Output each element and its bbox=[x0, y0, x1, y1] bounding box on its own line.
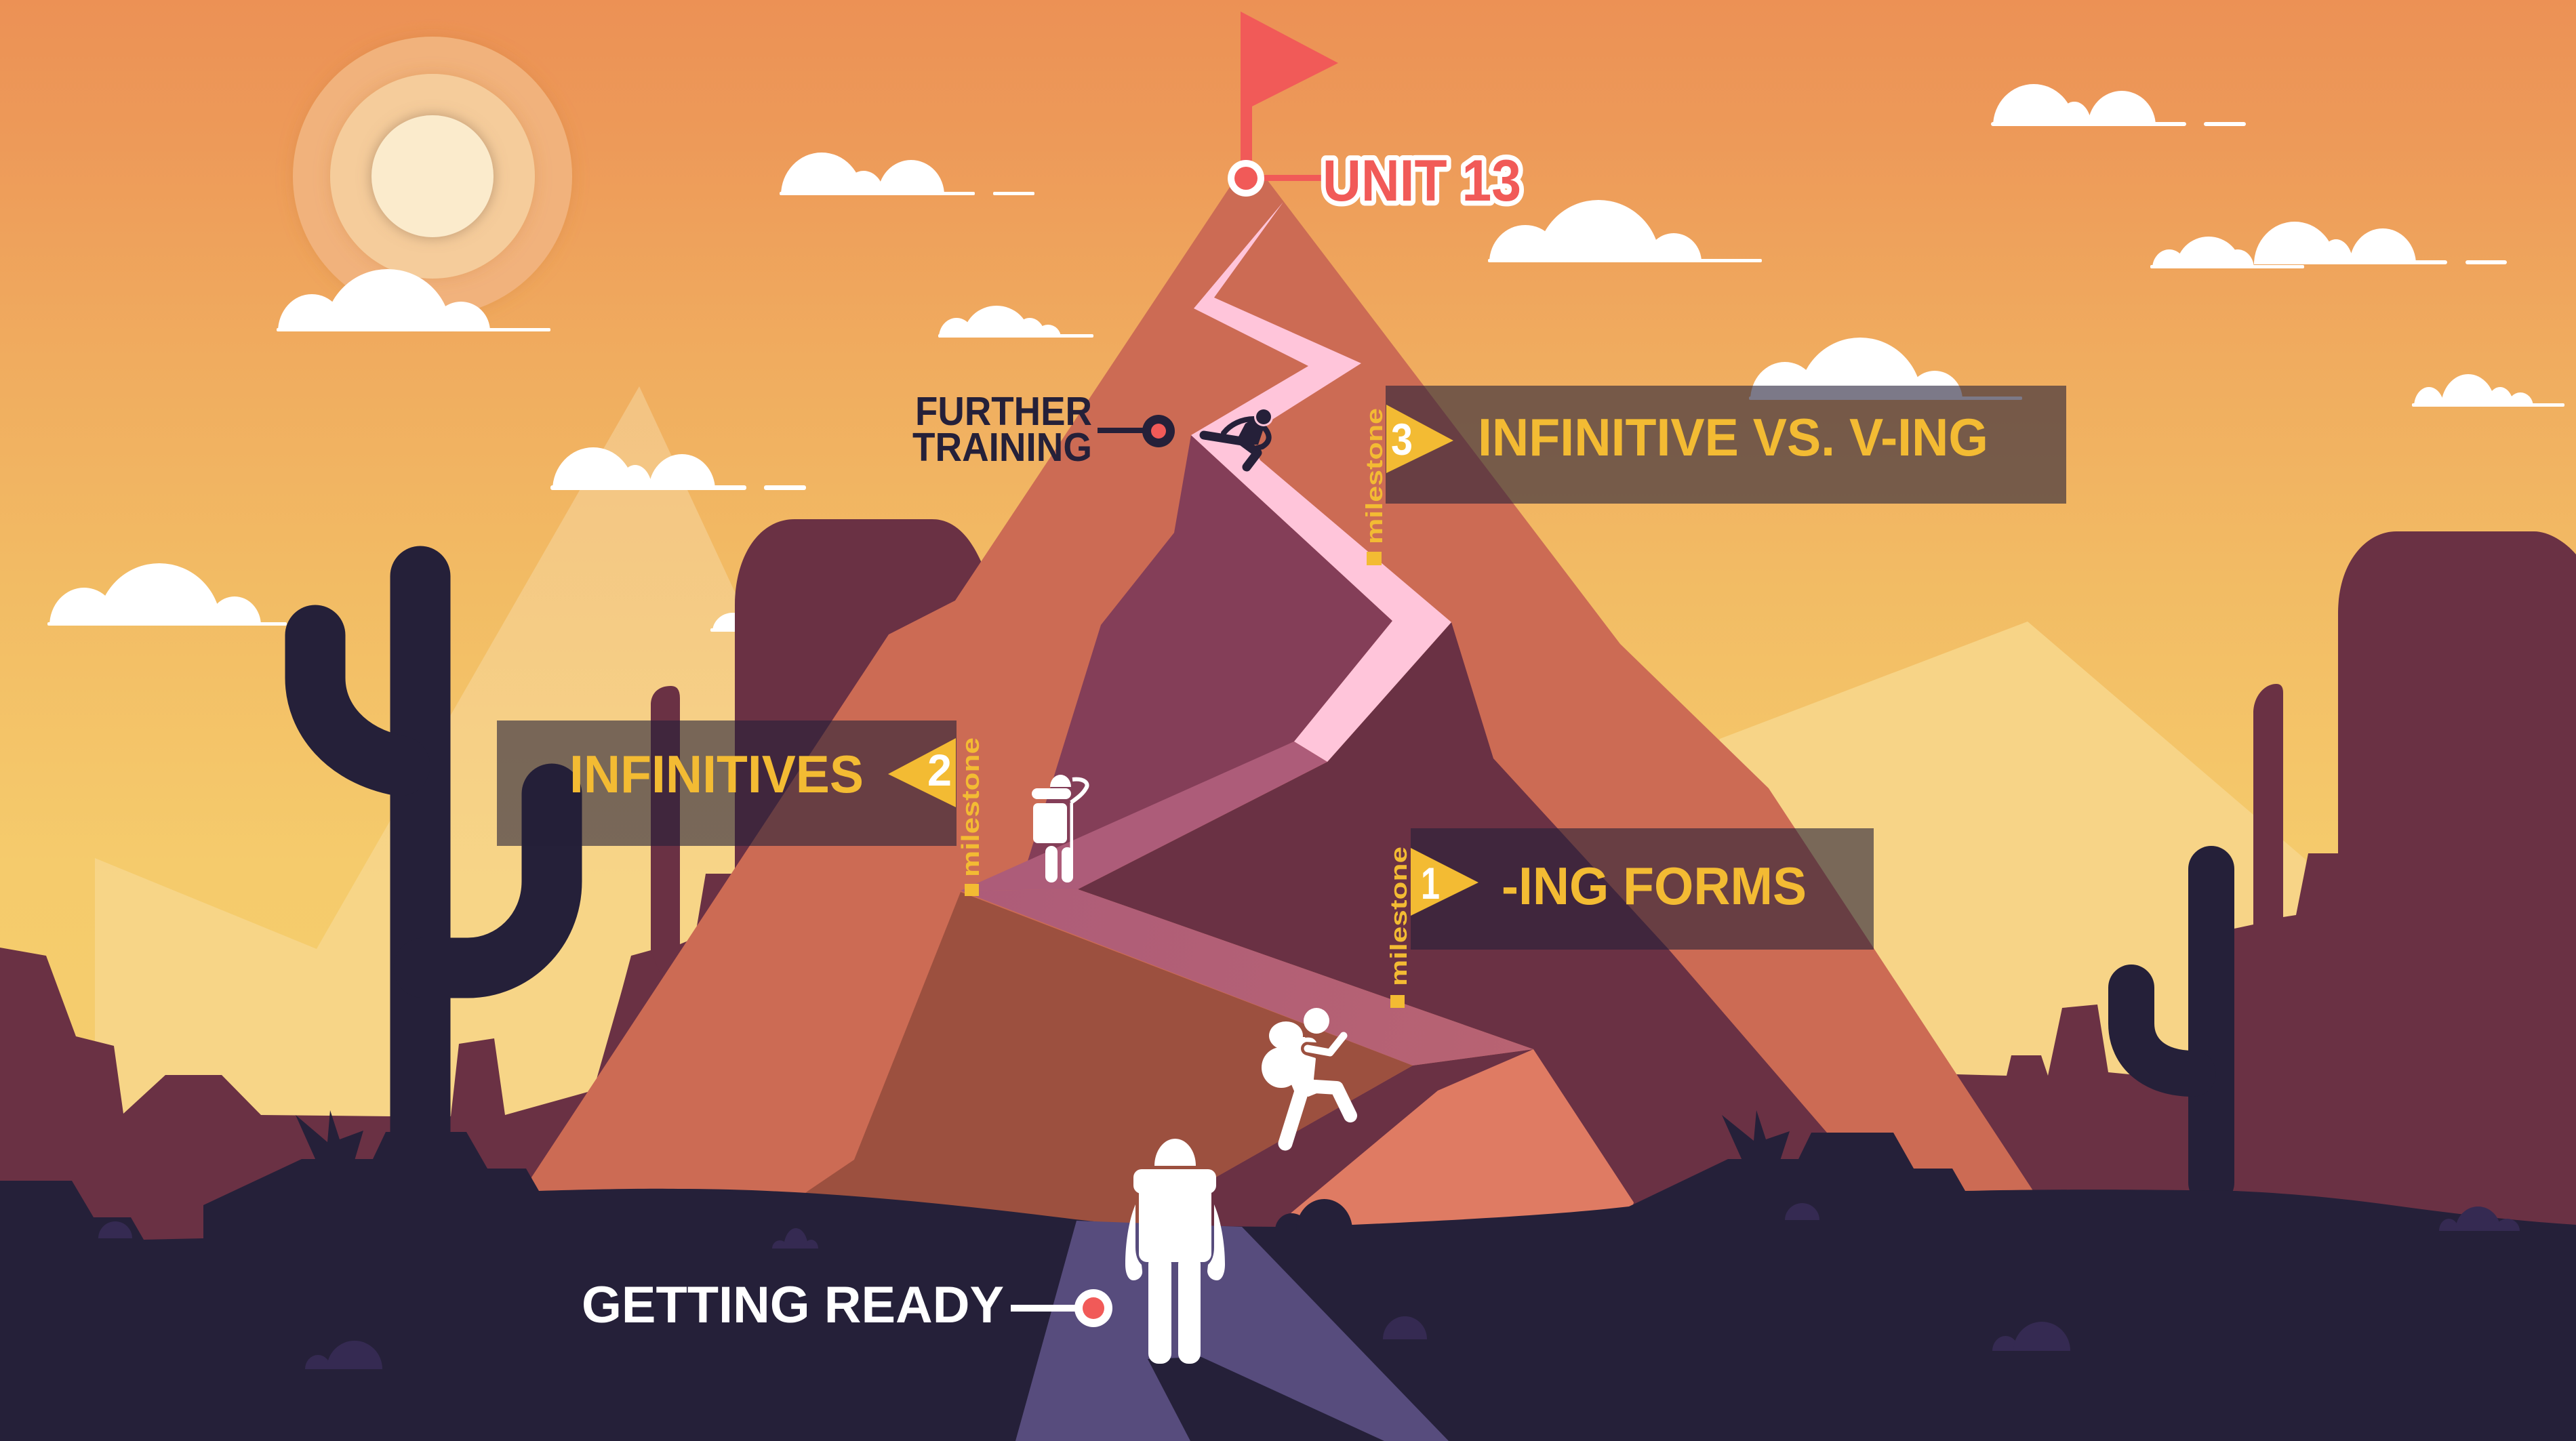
cloud far left bbox=[47, 563, 287, 626]
cloud right small bbox=[2150, 237, 2304, 268]
trail: upper pink section bbox=[1191, 202, 1451, 762]
left foreground ridge bbox=[0, 948, 678, 1261]
cloud hidden behind mesa bbox=[710, 613, 765, 632]
mountain shadow faces bbox=[780, 435, 1844, 1230]
milestone 2 tag: milestone bbox=[957, 737, 984, 877]
getting ready marker bbox=[1011, 1289, 1112, 1327]
ground bush by road bbox=[1275, 1199, 1352, 1230]
figure: hiker with raised arm bbox=[1032, 775, 1087, 882]
milestone 2 panel bbox=[497, 720, 957, 846]
milestone 3 panel: 3 bbox=[1391, 414, 1413, 464]
milestone 1 tag: milestone bbox=[1386, 847, 1412, 986]
background hill: right bbox=[1627, 622, 2373, 1152]
title: unit 13: UNIT 13 bbox=[1323, 148, 1521, 214]
further training label bbox=[912, 389, 1092, 470]
trail: lower section bbox=[961, 889, 1533, 1065]
getting ready label: GETTING READY bbox=[582, 1276, 1004, 1334]
milestone 3 panel bbox=[1386, 386, 2066, 504]
cloud centre bbox=[938, 306, 1093, 338]
milestone 2 panel: 2 bbox=[927, 745, 952, 795]
figure: kicking climber bbox=[1204, 407, 1273, 467]
sun bbox=[293, 37, 572, 316]
road bbox=[1015, 1221, 1449, 1441]
figure: climbing hiker with backpack bbox=[1262, 1008, 1350, 1143]
milestone 1 panel: 1 bbox=[1421, 858, 1440, 908]
cloud right large bbox=[2254, 222, 2507, 264]
cloud over left hill bbox=[550, 447, 806, 490]
milestone 3 tag: milestone bbox=[1362, 408, 1388, 544]
trail: middle section bbox=[961, 742, 1327, 891]
milestone 2 panel: INFINITIVES bbox=[569, 744, 864, 804]
cloud top centre-left bbox=[780, 153, 1034, 195]
cloud far right bbox=[2412, 374, 2564, 407]
spiky plant left bbox=[296, 1110, 363, 1160]
ground silhouette bbox=[0, 1132, 2576, 1441]
summit marker bbox=[1228, 160, 1323, 197]
milestone 3 panel: INFINITIVE VS. V-ING bbox=[1478, 407, 1988, 467]
milestone 1 panel bbox=[1411, 828, 1874, 950]
flag and pole bbox=[1241, 12, 1338, 169]
right cactus bbox=[2131, 869, 2211, 1183]
cloud behind box 3 bbox=[1749, 338, 2022, 400]
cloud right of summit bbox=[1488, 200, 1762, 262]
background hill: left bbox=[95, 386, 881, 1152]
figure: large hiker at base bbox=[1125, 1139, 1225, 1364]
cloud near sun bbox=[277, 269, 550, 331]
right mesa and column bbox=[1898, 531, 2576, 1288]
large cactus bbox=[315, 576, 552, 1152]
further training label: FURTHER bbox=[915, 389, 1092, 434]
cloud top right bbox=[1991, 84, 2246, 126]
milestone 3 tag bbox=[1362, 408, 1388, 565]
further training marker bbox=[1098, 415, 1175, 447]
mountain base bbox=[531, 163, 2040, 1227]
spiky plant right bbox=[1722, 1110, 1790, 1160]
milestone 1 tag bbox=[1386, 847, 1412, 1008]
milestone 1 panel: -ING FORMS bbox=[1502, 856, 1807, 916]
further training label: TRAINING bbox=[912, 425, 1092, 470]
ground bushes bbox=[98, 1203, 2520, 1369]
left mesa and column bbox=[615, 519, 1017, 1017]
